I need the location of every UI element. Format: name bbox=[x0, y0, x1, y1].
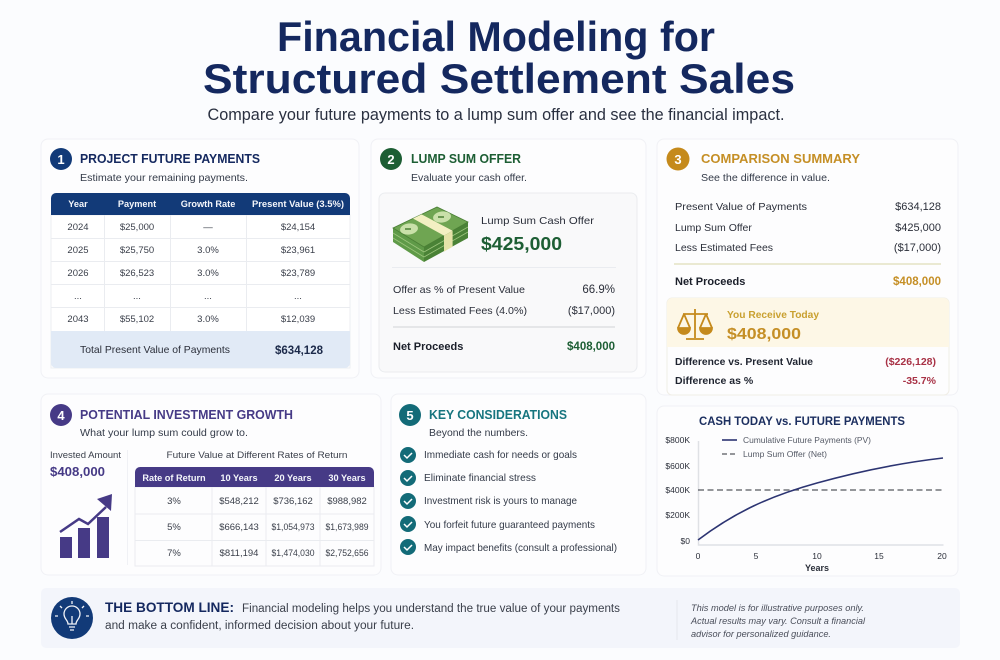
icon: number 1 bbox=[50, 148, 72, 170]
table: future values: $811,194 bbox=[220, 548, 258, 559]
line chart: $800K bbox=[665, 435, 690, 445]
table: future payments: Growth Rate bbox=[181, 199, 235, 209]
panel: project future payments bbox=[41, 139, 359, 378]
text: disclaimer: This model is for illustrative purposes only. bbox=[691, 603, 864, 613]
table: future payments: Payment bbox=[118, 199, 156, 209]
heading: potential investment growth: POTENTIAL INVESTMENT GROWTH bbox=[80, 407, 293, 422]
table: future payments: $25,750 bbox=[120, 245, 154, 256]
list: comparison rows: Net Proceeds bbox=[675, 276, 745, 288]
line chart: Years bbox=[805, 563, 829, 573]
table: future payments: 2024 bbox=[67, 222, 89, 233]
card: offer details: 66.9% bbox=[582, 284, 615, 296]
text: bottom line bbox=[105, 600, 620, 632]
legend: Cumulative Future Payments (PV) bbox=[743, 435, 871, 445]
card: offer details bbox=[379, 193, 637, 372]
table: future payments: 3.0% bbox=[197, 245, 219, 256]
text: invested amount value: $408,000 bbox=[50, 465, 105, 479]
table: future payments: $634,128 bbox=[275, 345, 324, 357]
icon: growth chart bbox=[60, 494, 112, 558]
icon: light bulb bbox=[51, 597, 93, 639]
text: growth subtitle: What your lump sum could grow to. bbox=[80, 427, 248, 439]
table: future values: $548,212 bbox=[219, 496, 259, 507]
list: comparison rows: ($17,000) bbox=[894, 242, 941, 254]
icon: number 1: 1 bbox=[57, 152, 65, 167]
heading: project future payments: PROJECT FUTURE PAYMENTS bbox=[80, 151, 260, 166]
text: cash offer value: $425,000 bbox=[481, 234, 562, 254]
line chart: $0 bbox=[681, 536, 690, 546]
text: project subtitle: Estimate your remaining payments. bbox=[80, 172, 248, 184]
table: future payments: 2025 bbox=[67, 245, 89, 256]
list: comparison rows: $634,128 bbox=[895, 201, 941, 213]
table: future payments: Present Value (3.5%) bbox=[252, 199, 344, 209]
heading: chart title: CASH TODAY vs. FUTURE PAYMENTS bbox=[699, 414, 905, 428]
panel: key considerations bbox=[391, 394, 646, 575]
table: future payments: $55,102 bbox=[120, 314, 154, 325]
table: future values: $988,982 bbox=[327, 496, 367, 507]
text: offer subtitle: Evaluate your cash offer. bbox=[411, 172, 527, 184]
line chart bbox=[665, 435, 947, 573]
line chart: $200K bbox=[665, 510, 690, 520]
panel: lump sum offer bbox=[371, 139, 646, 378]
table: future payments bbox=[51, 193, 350, 368]
table: future values: 20 Years bbox=[274, 473, 312, 483]
list: considerations: Investment risk is yours to manage bbox=[424, 495, 577, 507]
icon: scales bbox=[678, 309, 712, 339]
table: future payments: 3.0% bbox=[197, 268, 219, 279]
text: disclaimer: advisor for personalized guidance. bbox=[691, 629, 831, 639]
list: comparison rows: Present Value of Payments bbox=[675, 201, 807, 213]
title: Financial Modeling for bbox=[277, 13, 715, 60]
text: considerations subtitle: Beyond the numbers. bbox=[429, 427, 528, 439]
legend: Lump Sum Offer (Net) bbox=[743, 449, 827, 459]
icon: number 4 bbox=[50, 404, 72, 426]
list: considerations: You forfeit future guaranteed payments bbox=[424, 519, 595, 531]
text: table title: Future Value at Different Rates of Return bbox=[166, 450, 348, 461]
callout: you receive today: You Receive Today bbox=[727, 309, 819, 321]
panel: the bottom line bbox=[41, 588, 960, 648]
line chart: $400K bbox=[665, 485, 690, 495]
table: future payments: ... bbox=[133, 291, 141, 302]
panel: comparison summary bbox=[657, 139, 958, 395]
heading: lump sum offer: LUMP SUM OFFER bbox=[411, 151, 522, 166]
card: offer details: Less Estimated Fees (4.0%) bbox=[393, 305, 527, 317]
text: bottom line: Financial modeling helps you understand the true value of your payments bbox=[242, 603, 620, 615]
callout: you receive today: $408,000 bbox=[727, 326, 801, 343]
text: invested amount label: Invested Amount bbox=[50, 450, 121, 461]
line chart: 15 bbox=[874, 551, 884, 561]
card: offer details: $408,000 bbox=[567, 341, 615, 353]
list: considerations: Eliminate financial stress bbox=[424, 472, 536, 484]
table: future values: $1,474,030 bbox=[272, 548, 314, 559]
subtitle: Compare your future payments to a lump sum offer and see the financial impact. bbox=[208, 105, 784, 124]
text: cash offer label: Lump Sum Cash Offer bbox=[481, 215, 595, 227]
table: future payments: 3.0% bbox=[197, 314, 219, 325]
table: future values: $1,673,989 bbox=[326, 522, 368, 533]
legend bbox=[722, 435, 871, 459]
table: future payments: 2026 bbox=[67, 268, 89, 279]
table: future payments: ... bbox=[74, 291, 82, 302]
icon: number 4: 4 bbox=[57, 408, 65, 423]
heading: comparison summary: COMPARISON SUMMARY bbox=[701, 151, 860, 166]
table: future values: $1,054,973 bbox=[272, 522, 314, 533]
icon: money stack bbox=[393, 207, 468, 262]
list: comparison rows: $425,000 bbox=[895, 222, 941, 234]
text: bottom line: and make a confident, informed decision about your future. bbox=[105, 620, 414, 632]
icon: number 3 bbox=[666, 148, 690, 170]
text: disclaimer: Actual results may vary. Consult a financial bbox=[690, 616, 866, 626]
table: future values: 3% bbox=[167, 496, 181, 507]
text: disclaimer bbox=[690, 603, 866, 639]
text: comparison subtitle: See the difference in value. bbox=[701, 172, 830, 184]
table: future payments: ... bbox=[294, 291, 302, 302]
line chart: $600K bbox=[665, 461, 690, 471]
card: offer details: Net Proceeds bbox=[393, 341, 463, 353]
table: future payments: $24,154 bbox=[281, 222, 315, 233]
line chart: 5 bbox=[754, 551, 759, 561]
table: future payments: $23,789 bbox=[281, 268, 315, 279]
card: offer details: Offer as % of Present Value bbox=[393, 284, 525, 296]
table: future values: $666,143 bbox=[219, 522, 259, 533]
callout: you receive today: Difference vs. Present Value bbox=[675, 356, 813, 368]
title bbox=[203, 13, 795, 102]
title: Structured Settlement Sales bbox=[203, 55, 795, 102]
icon: number 2 bbox=[380, 148, 402, 170]
table: future payments: Total Present Value of Payments bbox=[80, 344, 230, 356]
table: future values: $736,162 bbox=[273, 496, 313, 507]
list: comparison rows bbox=[674, 201, 941, 288]
text: bottom line: THE BOTTOM LINE: bbox=[105, 600, 234, 615]
table: future values: $2,752,656 bbox=[326, 548, 368, 559]
list: comparison rows: $408,000 bbox=[893, 276, 941, 288]
table: future payments: ... bbox=[204, 291, 212, 302]
line chart: 20 bbox=[937, 551, 947, 561]
icon: number 5 bbox=[399, 404, 421, 426]
callout: you receive today: ($226,128) bbox=[885, 356, 936, 368]
panel: potential investment growth bbox=[41, 394, 381, 575]
list: comparison rows: Less Estimated Fees bbox=[675, 242, 773, 254]
table: future payments: — bbox=[203, 222, 213, 233]
table: future payments: $23,961 bbox=[281, 245, 315, 256]
line chart: 0 bbox=[696, 551, 701, 561]
table: future payments: 2043 bbox=[67, 314, 89, 325]
line chart: 10 bbox=[812, 551, 822, 561]
callout: you receive today: Difference as % bbox=[675, 375, 754, 387]
table: future values: 30 Years bbox=[328, 473, 366, 483]
table: future values: Rate of Return bbox=[142, 473, 206, 483]
table: future payments: $26,523 bbox=[120, 268, 154, 279]
table: future values bbox=[135, 467, 374, 566]
callout: you receive today bbox=[667, 298, 949, 395]
table: future values: 7% bbox=[167, 548, 181, 559]
table: future payments: $12,039 bbox=[281, 314, 315, 325]
callout: you receive today: -35.7% bbox=[903, 375, 937, 387]
table: future payments: Year bbox=[68, 199, 88, 209]
list: comparison rows: Lump Sum Offer bbox=[675, 222, 752, 234]
icon: number 3: 3 bbox=[674, 152, 682, 167]
panel: cash today vs future payments bbox=[657, 406, 958, 576]
table: future payments: $25,000 bbox=[120, 222, 154, 233]
icon: number 5: 5 bbox=[406, 408, 414, 423]
card: offer details: ($17,000) bbox=[568, 305, 615, 317]
list: considerations: May impact benefits (consult a professional) bbox=[424, 542, 617, 554]
heading: key considerations: KEY CONSIDERATIONS bbox=[429, 407, 567, 422]
icon: number 2: 2 bbox=[387, 152, 395, 167]
list: considerations: Immediate cash for needs or goals bbox=[424, 449, 577, 461]
table: future values: 10 Years bbox=[220, 473, 258, 483]
list: considerations bbox=[400, 447, 617, 555]
table: future values: 5% bbox=[167, 522, 181, 533]
